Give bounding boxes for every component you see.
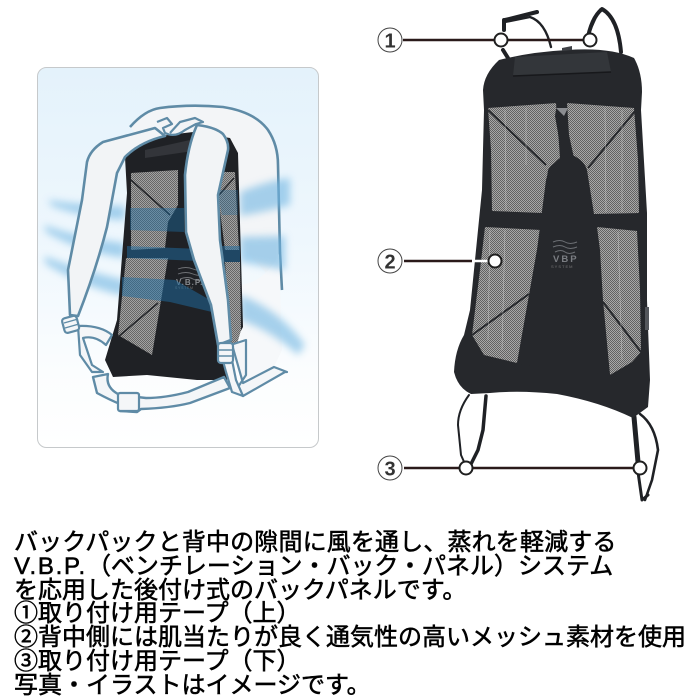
callout 1: top tapes: 1 [384, 30, 396, 52]
V.B.P. logo [551, 240, 579, 269]
callout 3: bottom tapes: 3 [384, 458, 396, 480]
V.B.P. logo on pack: V.B.P. [176, 278, 203, 287]
V.B.P. logo: VBP [553, 254, 579, 265]
mesh upper right [566, 103, 639, 214]
bottom attachment straps [458, 395, 658, 500]
description text block: を応用した後付け式のバックパネルです。 [14, 577, 466, 604]
right buckle and tail strap [218, 340, 287, 396]
mesh back panel on pack [105, 132, 243, 380]
panel: ventilation illustration [38, 68, 318, 448]
backpack back panel product photo [454, 9, 658, 500]
description text block: ③取り付け用テープ（下） [14, 648, 301, 675]
top handle [157, 118, 203, 135]
mesh lower left [472, 227, 541, 363]
hip belt [93, 374, 230, 412]
backpack body outline [130, 106, 282, 290]
callout 2: mesh: 2 [384, 252, 396, 274]
seams and cords [472, 110, 641, 352]
V.B.P. logo on pack [175, 268, 207, 290]
callout 2: mesh [378, 249, 502, 274]
description text block: バックパックと背中の隙間に風を通し、蒸れを軽減する [14, 529, 617, 556]
mesh lower right [597, 227, 641, 375]
description text block: ①取り付け用テープ（上） [14, 600, 301, 627]
mesh upper left [488, 103, 567, 213]
callout 1: top tapes [378, 28, 596, 52]
callout 3: bottom tapes [378, 456, 646, 480]
description text block: 写真・イラストはイメージです。 [14, 672, 371, 699]
V.B.P. logo on pack: SYSTEM [175, 286, 194, 290]
left shoulder strap [68, 128, 165, 316]
description text block: ②背中側には肌当たりが良く通気性の高いメッシュ素材を使用 [14, 624, 686, 651]
wind tint through mesh [122, 190, 240, 312]
panel body [454, 49, 650, 418]
centre spine [517, 103, 610, 375]
vertical light ribs in mesh [488, 108, 622, 360]
V.B.P. logo: SYSTEM [551, 264, 573, 269]
description text block: V.B.P.（ベンチレーション・バック・パネル）システム [14, 553, 613, 580]
wind streams [44, 178, 305, 355]
top fabric flap [513, 52, 611, 76]
left buckle and lower strap [61, 315, 112, 372]
description text block [14, 529, 686, 699]
right shoulder strap [185, 125, 231, 345]
top attachment straps [503, 9, 621, 58]
side label tab [645, 307, 649, 330]
belt buckle [118, 393, 139, 411]
